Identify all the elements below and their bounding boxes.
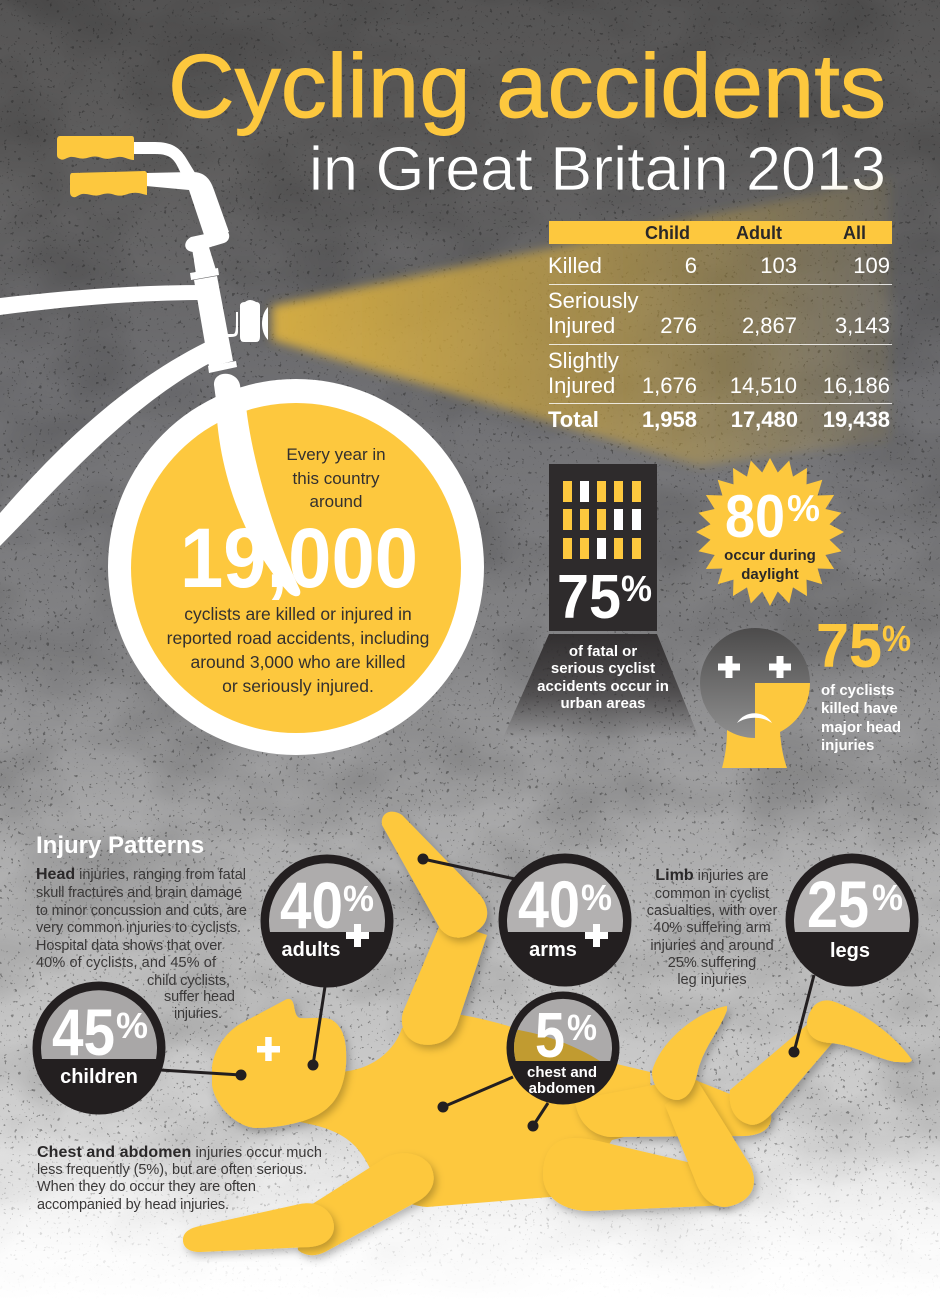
collars [190,268,219,280]
eye crosses [718,656,791,678]
stat circle: children 45%: 45 [52,995,115,1069]
torso [300,1012,652,1207]
text block: head injuries: Hospital data shows that over [36,938,222,954]
casualties table: Slightly [548,348,619,373]
lamp lens [262,307,268,340]
connector lines [160,854,814,1132]
text block: head injuries: child cyclists, [147,973,230,989]
casualties table: 16,186 [823,373,890,398]
text block: limb injuries: Limb injuries are [655,867,769,884]
stat circle: chest and abdomen 5%: % [567,1007,597,1048]
urban text [537,643,669,712]
head injury text: of cyclists [821,682,894,699]
text block: head injuries: very common injuries to cyclists. [36,920,241,936]
casualties table: 2,867 [742,313,797,338]
stat circle: arms 40%: % [581,877,612,918]
panel: head injuries face [700,612,911,768]
foot [807,1000,912,1062]
sad mouth [737,713,772,723]
stat circle: children 45%: % [116,1005,148,1046]
adults connector [308,980,326,1070]
urban text: of fatal or [569,643,637,660]
text block: chest and abdomen: accompanied by head injuries. [37,1197,229,1213]
text block: head injuries [36,866,247,1022]
stat circle: children 45%: children [60,1066,138,1088]
yellow wheel disc [131,403,461,733]
text block: chest and abdomen: Chest and abdomen injuries occur much [37,1144,322,1161]
stat circle: arms 40%: 40 [518,867,580,941]
building [549,464,657,631]
stat circle: adults 40%: 40 [280,868,343,942]
text block: limb injuries: casualties, with over [647,903,777,919]
light beam from the bicycle lamp [272,178,890,466]
text block: chest and abdomen: less frequently (5%), but are often serious. [37,1162,307,1178]
abdomen connector [528,1103,548,1132]
back thigh [575,1078,771,1137]
head tube [194,276,233,367]
text block: head injuries: Head injuries, ranging from fatal [36,866,246,883]
casualties table: Total [548,407,599,432]
panel: 19,000 wheel callout [131,395,461,733]
front wheel [108,379,484,755]
daylight text [724,547,816,583]
yellow lower face and neck [722,683,810,768]
body text [167,604,429,696]
fork crown [214,374,242,400]
urban text: serious cyclist [551,660,655,677]
front shin [665,1080,754,1207]
stat circle: children 45% [32,982,166,1114]
stat circle: arms 40% [498,854,632,986]
lower upper arm [295,1153,434,1255]
fork blade [216,395,300,596]
body text: reported road accidents, including [167,628,429,648]
top tube [0,285,208,315]
text block: limb injuries: injuries and around [650,938,774,954]
75% figure: % [621,568,652,609]
stat circle: legs 25%: 25 [807,867,869,941]
injured cyclist figure [183,812,912,1255]
legs connector [788,975,814,1058]
80% figure: 80 [725,483,785,550]
stat circle: legs 25%: legs [830,940,870,962]
stat circle: adults 40%: % [343,878,374,919]
head cross [257,1037,280,1061]
head injury text: injuries [821,737,874,754]
road trapezoid [503,634,699,738]
second foot [652,1006,727,1100]
big number: 19,000 [180,511,418,605]
stem [192,244,216,274]
starburst [696,458,844,606]
head injury text: major head [821,719,901,736]
title [168,37,886,204]
stat circle: chest and abdomen 5%: abdomen [529,1080,595,1097]
down tube [0,342,212,546]
casualties table: 3,143 [835,313,890,338]
text block: head injuries: 40% of cyclists, and 45% of [36,955,217,971]
daylight text: occur during [724,547,816,564]
chest connector [438,1077,513,1112]
title: in Great Britain 2013 [309,135,886,204]
stat circle: chest and abdomen 5%: 5 [535,999,565,1071]
text block: chest and abdomen [37,1144,322,1213]
handlebar top [134,142,197,176]
casualties table: Injured [548,313,615,338]
casualties table: 109 [853,253,890,278]
head [212,999,346,1128]
text block: limb injuries: common in cyclist [655,886,769,902]
text block: limb injuries: 25% suffering [668,955,756,971]
casualties table: Killed [548,253,602,278]
casualties table: 1,676 [642,373,697,398]
raised forearm [382,812,487,938]
casualties table: 19,438 [823,407,890,432]
head injury text [821,682,901,754]
casualties table: 1,958 [642,407,697,432]
children connector [160,1070,246,1080]
text block: limb injuries: 40% suffering arm [653,920,771,936]
text block: limb injuries [647,867,777,988]
body text: or seriously injured. [222,676,374,696]
clamp [185,230,229,252]
75% figure: 75 [557,563,621,632]
windows [563,481,641,559]
stat circle: chest and abdomen 5% [505,992,620,1104]
panel: daylight starburst: % [787,488,820,529]
body text: around 3,000 who are killed [190,652,406,672]
casualties table: 103 [760,253,797,278]
head injury text: killed have [821,700,898,717]
casualties table: 6 [685,253,697,278]
arms connector [418,854,515,879]
urban text: urban areas [560,695,646,712]
urban text: accidents occur in [537,678,669,695]
lower forearm [183,1203,334,1252]
lamp body [240,300,260,342]
stat circle: arms 40%: arms [529,939,577,961]
text block: limb injuries: leg injuries [677,972,747,988]
heading: injury patterns: Injury Patterns [36,832,204,859]
daylight text: daylight [741,566,799,583]
intro text: around [310,492,362,511]
face circle [700,628,810,738]
table header: Adult [736,223,782,243]
casualties table: Injured [548,373,615,398]
intro text: this country [293,469,380,488]
stat circle: legs 25%: % [872,877,903,918]
handlebar lower [146,172,229,238]
stat circle: legs 25% [786,854,918,986]
front thigh [543,1138,730,1211]
stat circle: adults 40% [260,854,394,988]
panel: urban areas building [503,464,699,738]
text block: chest and abdomen: When they do occur they are often [37,1179,256,1195]
stat circle: adults 40%: adults [282,939,340,961]
upper shin [730,1018,833,1125]
text block: head injuries: suffer head [164,989,235,1005]
75% yellow figure: 75 [816,612,882,681]
casualties table: Seriously [548,288,638,313]
casualties table [548,221,892,432]
bell bracket [227,312,238,337]
table header: Child [645,223,690,243]
body text: cyclists are killed or injured in [184,604,412,624]
panel: daylight starburst [696,458,844,606]
handlebar grips [57,136,147,197]
casualties table: 276 [660,313,697,338]
intro text [286,445,386,511]
bicycle frame [0,142,484,755]
panel: head injuries face: % [882,618,911,659]
table header: All [843,223,866,243]
raised upper arm [402,920,487,1045]
table header [549,221,892,244]
text block: head injuries: to minor concussion and cuts, are [36,903,247,919]
title: Cycling accidents [168,37,886,137]
casualties table: 17,480 [731,407,798,432]
intro text: Every year in [286,445,386,464]
text block: head injuries: injuries. [174,1006,222,1022]
text block: head injuries: skull fractures and brain damage [36,885,242,901]
stat circle: chest and abdomen 5%: chest and [527,1064,597,1081]
casualties table: 14,510 [730,373,797,398]
